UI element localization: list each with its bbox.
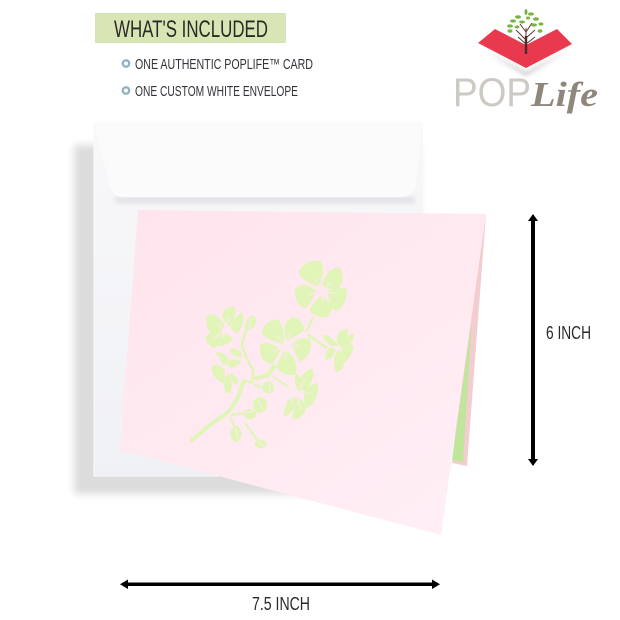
blossom: upper left bbox=[207, 307, 242, 347]
logo wordmark: Life: Life bbox=[530, 75, 598, 114]
buds bbox=[232, 315, 273, 447]
heading: what's included bbox=[95, 13, 286, 43]
branch bbox=[192, 318, 326, 442]
logo: red open book bbox=[478, 29, 572, 68]
dimension: height arrow bbox=[528, 214, 538, 466]
list of included items bbox=[123, 57, 313, 100]
envelope shadow bbox=[74, 145, 419, 494]
envelope body bbox=[94, 122, 423, 476]
logo: poplife bbox=[453, 9, 598, 115]
cherry blossom cutout bbox=[192, 262, 353, 447]
dimension label: 7.5 inch: 7.5 INCH bbox=[252, 594, 310, 614]
flap shadow bbox=[115, 197, 415, 203]
logo shadow bbox=[482, 49, 570, 76]
blossom: middle bbox=[261, 318, 310, 374]
blossom: right bbox=[324, 330, 353, 371]
card back panel bbox=[452, 214, 486, 466]
envelope with shadow bbox=[74, 122, 423, 494]
card inner green sheet bbox=[452, 320, 472, 462]
greeting card front bbox=[120, 210, 486, 535]
envelope flap bbox=[94, 122, 423, 197]
stamens bbox=[213, 277, 335, 447]
dimension: width arrow bbox=[120, 580, 440, 589]
petals bbox=[207, 262, 353, 447]
list item: poplife card: ONE AUTHENTIC POPLIFE™ CARD bbox=[135, 57, 313, 73]
list item: poplife card bbox=[123, 57, 313, 73]
logo wordmark: POP: POP bbox=[453, 71, 531, 115]
list item: envelope: ONE CUSTOM WHITE ENVELOPE bbox=[135, 84, 298, 100]
blossom: top bbox=[296, 262, 346, 316]
blossom: lower left bbox=[213, 350, 241, 392]
heading: what's included: WHAT'S INCLUDED bbox=[114, 16, 268, 43]
dimension label: 6 inch: 6 INCH bbox=[546, 323, 591, 343]
blossom: lower right bbox=[285, 370, 317, 418]
list item: envelope bbox=[123, 84, 298, 100]
logo: tree bbox=[507, 9, 544, 54]
